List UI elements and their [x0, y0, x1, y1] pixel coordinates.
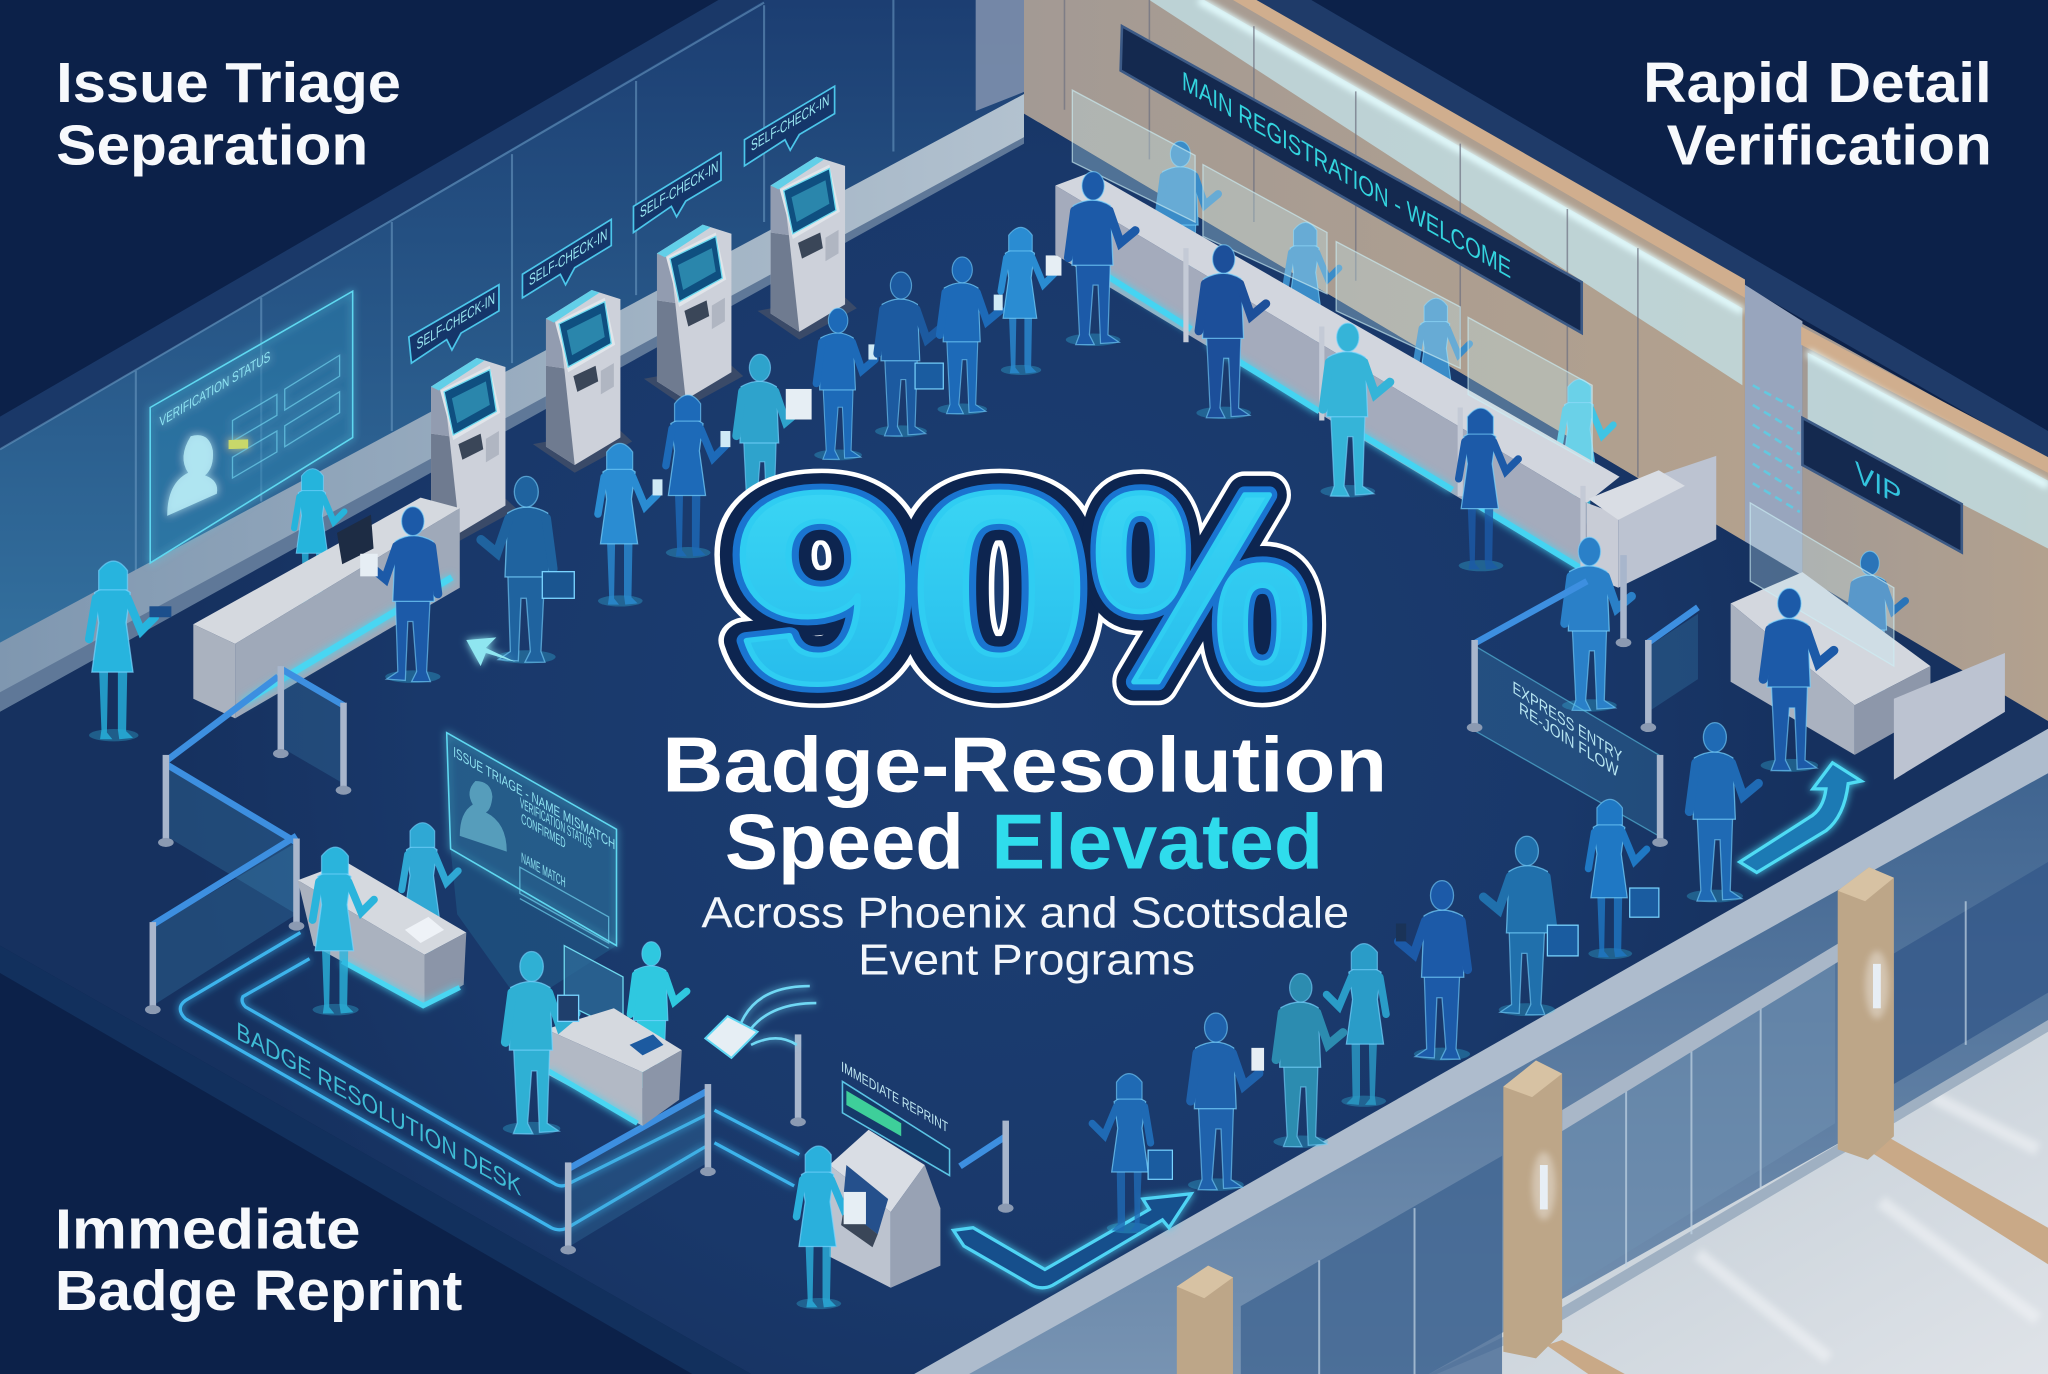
- left check-in desk: [193, 498, 460, 718]
- floor lower-left edge: [0, 946, 751, 1374]
- lower-right ledge: [914, 729, 2048, 1374]
- man with phone: [814, 308, 877, 460]
- heading: issue triage separation: Separation: [56, 114, 368, 177]
- queue barriers: [145, 666, 1014, 1254]
- re-join flow text: RE-JOIN FLOW: [1519, 698, 1619, 781]
- kiosk 3: [644, 225, 743, 407]
- heading: immediate badge reprint: Immediate: [55, 1198, 360, 1261]
- tag 4: [744, 86, 835, 166]
- man with briefcase: [481, 476, 574, 664]
- VIP clerk: [1847, 551, 1905, 698]
- man in queue: [938, 257, 1003, 415]
- man at front: [1687, 723, 1758, 902]
- back-left glass wall: [0, 0, 1058, 712]
- man in teal: [1273, 974, 1343, 1148]
- badge printer: [829, 1130, 940, 1288]
- big stat 90%: 0: [908, 436, 1091, 740]
- flying badge with swoosh: [705, 986, 816, 1058]
- VIP sign: [1802, 418, 1962, 552]
- big stat 90%: 0: [908, 436, 1091, 740]
- big stat 90%: %: [1092, 436, 1311, 740]
- right curved arrow: [1740, 763, 1861, 872]
- woman with case: [1588, 799, 1659, 959]
- tag 3: [633, 153, 721, 232]
- clerk at resolution desk: [628, 942, 687, 1088]
- lower-right glass facade and marble floor: [914, 771, 2048, 1374]
- VIP desk: [1731, 503, 2005, 780]
- man with suitcase: [875, 272, 943, 437]
- triage desk: [298, 862, 466, 1007]
- big stat 90%: 0: [908, 436, 1091, 740]
- big stat 90%: %: [1092, 436, 1311, 740]
- man on phone: [1396, 881, 1470, 1060]
- heading: rapid detail verification: [1643, 51, 1992, 177]
- heading: issue triage separation: Issue Triage: [56, 51, 401, 114]
- heading: rapid detail verification: Verification: [1667, 114, 1992, 177]
- tag 1: [409, 285, 499, 363]
- big stat 90%: 9: [731, 436, 914, 740]
- self-check-in kiosks and tags: [409, 86, 857, 541]
- heading: immediate badge reprint: [55, 1198, 463, 1322]
- resolution desk monitor: [564, 946, 623, 1032]
- resolution desk floor outline: [180, 933, 799, 1230]
- heading: issue triage separation: [56, 51, 401, 177]
- clerk at triage desk: [402, 823, 458, 977]
- woman on arrow: [1092, 1074, 1172, 1233]
- subheading: phoenix and scottsdale: Event Programs: [858, 936, 1195, 984]
- express entry barrier: [1467, 555, 1698, 847]
- verification status text: VERIFICATION STATUS: [159, 348, 270, 431]
- big stat 90%: 9: [731, 436, 914, 740]
- kiosk 1: [418, 358, 517, 541]
- woman with phone: [598, 443, 662, 607]
- headline: badge-resolution speed elevated: [662, 720, 1387, 886]
- heading: immediate badge reprint: Badge Reprint: [55, 1259, 463, 1322]
- man with case: [1483, 836, 1578, 1016]
- woman at printer: [796, 1146, 866, 1309]
- main registration counters: [1055, 172, 1716, 588]
- headline: badge-resolution speed elevated: Speed: [725, 798, 964, 886]
- VIP sign: VIP: [1855, 454, 1901, 514]
- main registration clerks: [1156, 141, 1613, 525]
- panel: issue triage hologram: [447, 733, 616, 1006]
- panel: verification status hologram: [150, 291, 353, 563]
- staff behind left desk: [294, 469, 344, 606]
- bottom floor arrow: [953, 1194, 1191, 1288]
- man at desk: [360, 507, 440, 683]
- man with tablet: [734, 354, 812, 519]
- headline: badge-resolution speed elevated: Badge-Resolution: [662, 720, 1387, 808]
- big stat 90%: [731, 436, 1311, 740]
- visitors at registration: [1066, 172, 1518, 571]
- bottom-right queue: [1188, 723, 1758, 1191]
- right wood wall: [1024, 0, 2048, 744]
- headline: badge-resolution speed elevated: Elevated: [991, 798, 1323, 886]
- big stat 90%: %: [1092, 436, 1311, 740]
- people at left: [89, 227, 1061, 741]
- resolution desk: [546, 1008, 682, 1126]
- tag 3: SELF-CHECK-IN: [640, 157, 718, 222]
- tag 4: SELF-CHECK-IN: [751, 91, 829, 155]
- cyan woman with tablet: [89, 561, 171, 741]
- glass partitions: [1072, 90, 1592, 464]
- wood posts with sconces: [1177, 867, 1894, 1374]
- tag 2: SELF-CHECK-IN: [529, 225, 607, 290]
- express entry text: EXPRESS ENTRY: [1512, 677, 1623, 767]
- tag 2: [522, 219, 611, 298]
- reprint label: IMMEDIATE REPRINT: [841, 1059, 949, 1137]
- woman at triage desk: [313, 847, 374, 1015]
- woman in queue: [1001, 227, 1061, 375]
- main registration sign: [1121, 26, 1582, 333]
- kiosk 4: [758, 157, 857, 340]
- big stat 90%: %: [1092, 436, 1311, 740]
- small floor arrow: [466, 637, 516, 666]
- woman gesturing: [1326, 944, 1386, 1107]
- big stat 90%: 9: [731, 436, 914, 740]
- heading: rapid detail verification: Rapid Detail: [1643, 51, 1992, 114]
- subheading: phoenix and scottsdale: [701, 889, 1349, 984]
- issue triage heading: ISSUE TRIAGE - NAME MISMATCH: [453, 744, 615, 853]
- VIP visitor: [1761, 588, 1834, 772]
- panel: issue triage hologram: NAME MATCH: [521, 850, 566, 891]
- kiosk 2: [533, 290, 632, 473]
- walking man: [1562, 537, 1632, 712]
- man with phone: [1188, 1013, 1264, 1191]
- reprint progress panel: [841, 1059, 950, 1175]
- man at resolution desk: [503, 951, 579, 1135]
- tag 1: SELF-CHECK-IN: [417, 289, 495, 354]
- panel: issue triage hologram: CONFIRMED: [521, 811, 566, 852]
- subheading: phoenix and scottsdale: Across Phoenix and Scottsdale: [701, 889, 1349, 937]
- big stat 90%: 9: [731, 436, 914, 740]
- big stat 90%: 0: [908, 436, 1091, 740]
- woman in dark suit: [666, 395, 730, 558]
- panel: issue triage hologram: VERIFICATION STATUS: [520, 795, 592, 852]
- sign text: MAIN REGISTRATION - WELCOME: [1182, 65, 1511, 284]
- badge resolution desk floor text: BADGE RESOLUTION DESK: [236, 1016, 521, 1202]
